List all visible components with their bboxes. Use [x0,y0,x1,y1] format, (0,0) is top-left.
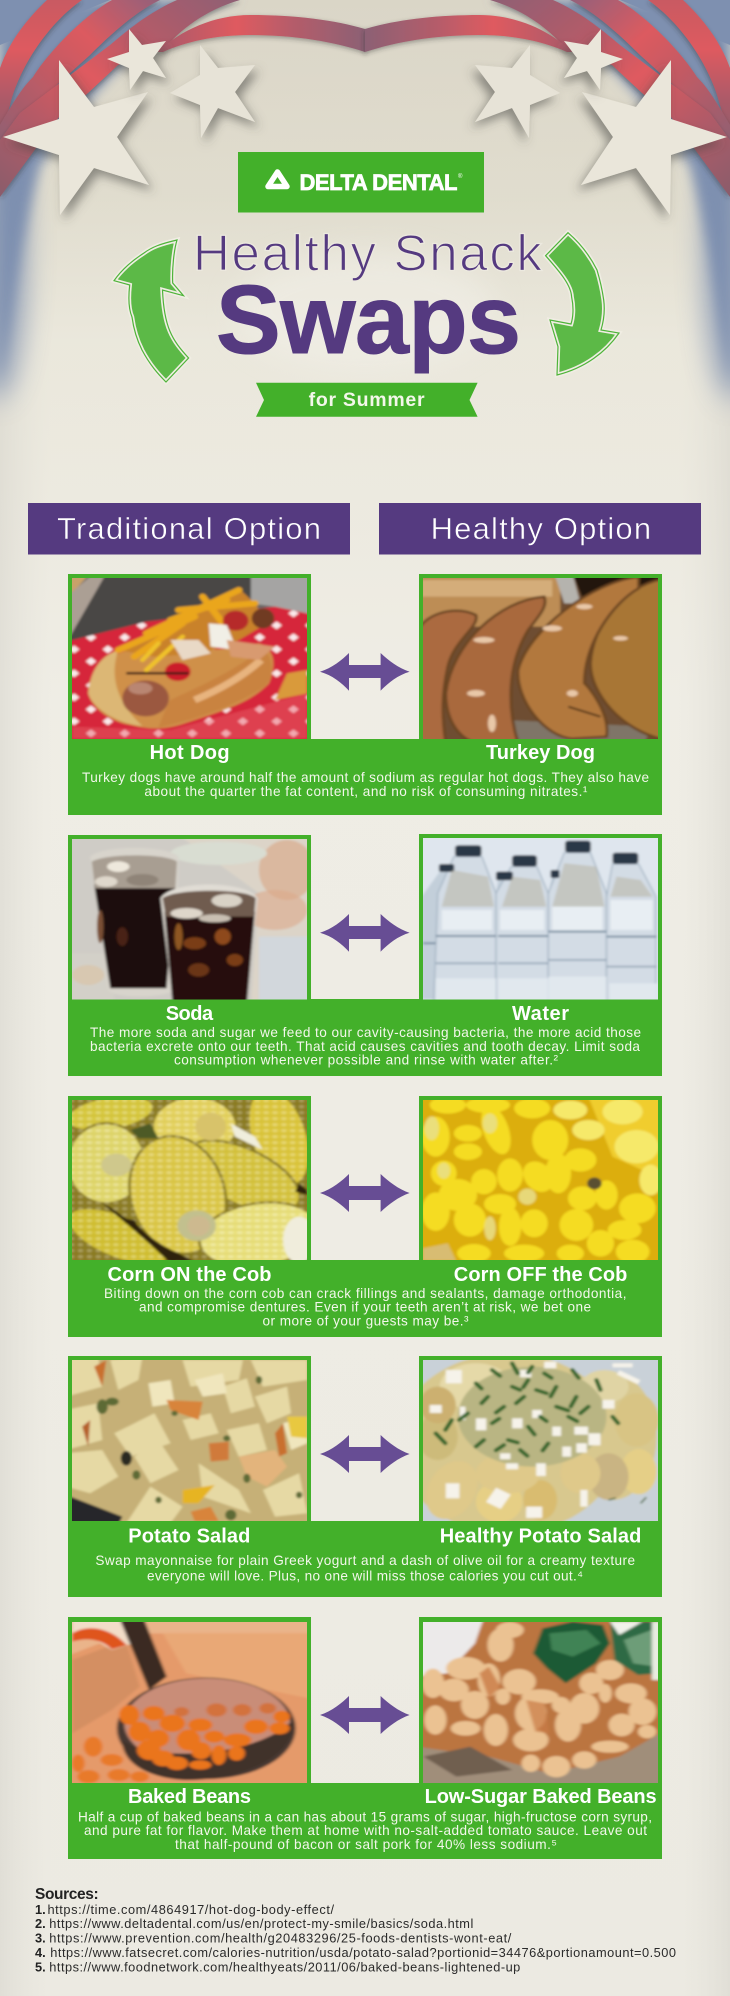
sources: https://www.deltadental.com/us/en/protect-my-smile/basics/soda.html [49,1916,473,1931]
logo: Delta Dental: ® [458,173,463,180]
photo: turkey dog [423,578,658,739]
sources: https://www.fatsecret.com/calories-nutrition/usda/potato-salad?portionid=34476&portionamount=0.500 [50,1945,676,1960]
title: Hot Dog: Hot Dog [150,742,230,764]
description: baked beans swap: and pure fat for flavor. Make them at home with no-salt-added tomato sauce. Leave out [84,1823,647,1838]
description: hot dog swap: about the quarter the fat content, and no risk of consuming nitrates.¹ [144,784,588,799]
photo: soda [72,839,307,1000]
title: Baked Beans: Baked Beans [128,1786,251,1808]
sources: https://www.foodnetwork.com/healthyeats/2011/06/baked-beans-lightened-up [49,1960,520,1975]
description: corn swap: or more of your guests may be.³ [262,1313,469,1328]
photo: corn on the cob [72,1100,307,1260]
logo: Delta Dental [238,152,484,212]
panel: soda vs water [66,834,665,1076]
sources: 3. [35,1931,46,1946]
description: baked beans swap [78,1810,652,1852]
description: soda swap: The more soda and sugar we feed to our cavity-causing bacteria, the more acid those [90,1025,641,1040]
description: potato salad swap [95,1553,635,1584]
description: baked beans swap: Half a cup of baked beans in a can has about 15 grams of sugar, high-fructose corn syrup, [78,1810,652,1825]
panel: baked beans [65,1617,666,1859]
sources: 2. [35,1916,46,1931]
column header: Healthy Option [379,503,701,554]
arrow: swap 1 [320,653,410,691]
description: potato salad swap: everyone will love. Plus, no one will miss those calories you cut out.⁴ [147,1569,583,1584]
description: soda swap [90,1025,641,1068]
photo: corn off the cob [423,1100,658,1260]
column header: Healthy Option: Healthy Option [431,511,651,546]
description: corn swap: and compromise dentures. Even if your teeth aren’t at risk, we bet one [139,1300,591,1315]
description: hot dog swap: Turkey dogs have around half the amount of sodium as regular hot dogs. They also have [82,770,649,785]
sources: 1. [35,1902,46,1917]
description: soda swap: bacteria excrete onto our teeth. That acid causes cavities and tooth decay. Limit soda [90,1039,640,1054]
description: soda swap: consumption whenever possible and rinse with water after.² [174,1053,558,1068]
ribbons and stars, right [365,0,730,215]
arrow: swap 4 [320,1435,410,1473]
title: Water: Water [512,1003,569,1025]
photo: baked beans [72,1622,307,1783]
arrow: swap 2 [320,914,410,952]
title: Swaps: Swaps [216,265,521,374]
sources: https://www.prevention.com/health/g20483296/25-foods-dentists-wont-eat/ [49,1931,512,1946]
title: Healthy Snack: Healthy Snack [193,224,542,282]
panel: corn on vs off the cob [57,1083,665,1337]
sources: 5. [35,1960,46,1975]
arrow: curved up [114,240,189,382]
arrow: swap 5 [320,1696,410,1734]
title: Low-Sugar Baked Beans: Low-Sugar Baked Beans [425,1786,657,1808]
sources: Sources: [35,1886,99,1903]
description: baked beans swap: that half-pound of bacon or salt pork for 40% less sodium.⁵ [175,1837,557,1852]
description: hot dog swap [82,770,649,799]
arrow: curved down [546,233,619,375]
photo: healthy potato salad [423,1360,658,1521]
description: corn swap: Biting down on the corn cob can crack fillings and sealants, damage orthodontia, [104,1286,626,1301]
photo: potato salad [72,1360,307,1521]
panel: hot dog vs turkey dog [66,573,665,815]
description: corn swap [104,1286,626,1328]
title: Potato Salad: Potato Salad [128,1525,250,1547]
title: Healthy Potato Salad: Healthy Potato Salad [440,1525,641,1547]
banner: for Summer [256,383,478,417]
title: Soda: Soda [166,1003,214,1025]
photo: low-sugar baked beans [423,1622,658,1783]
title: Corn ON the Cob: Corn ON the Cob [108,1264,272,1286]
arrow: swap 3 [320,1174,410,1212]
sources: 4. [35,1945,46,1960]
column header: Traditional Option [28,503,350,554]
logo: Delta Dental: DELTA DENTAL [300,170,458,195]
sources: https://time.com/4864917/hot-dog-body-effect/ [48,1902,334,1917]
photo: hot dog [72,578,307,739]
sources [35,1886,676,1975]
description: potato salad swap: Swap mayonnaise for plain Greek yogurt and a dash of olive oil for a creamy texture [95,1553,635,1568]
photo: water bottles [423,838,658,1000]
title: Turkey Dog: Turkey Dog [486,742,595,764]
banner: for Summer: for Summer [309,389,425,411]
title: Corn OFF the Cob: Corn OFF the Cob [454,1264,627,1286]
column header: Traditional Option: Traditional Option [57,511,321,546]
panel: potato salad [66,1353,665,1597]
ribbons and stars, left [0,0,365,215]
